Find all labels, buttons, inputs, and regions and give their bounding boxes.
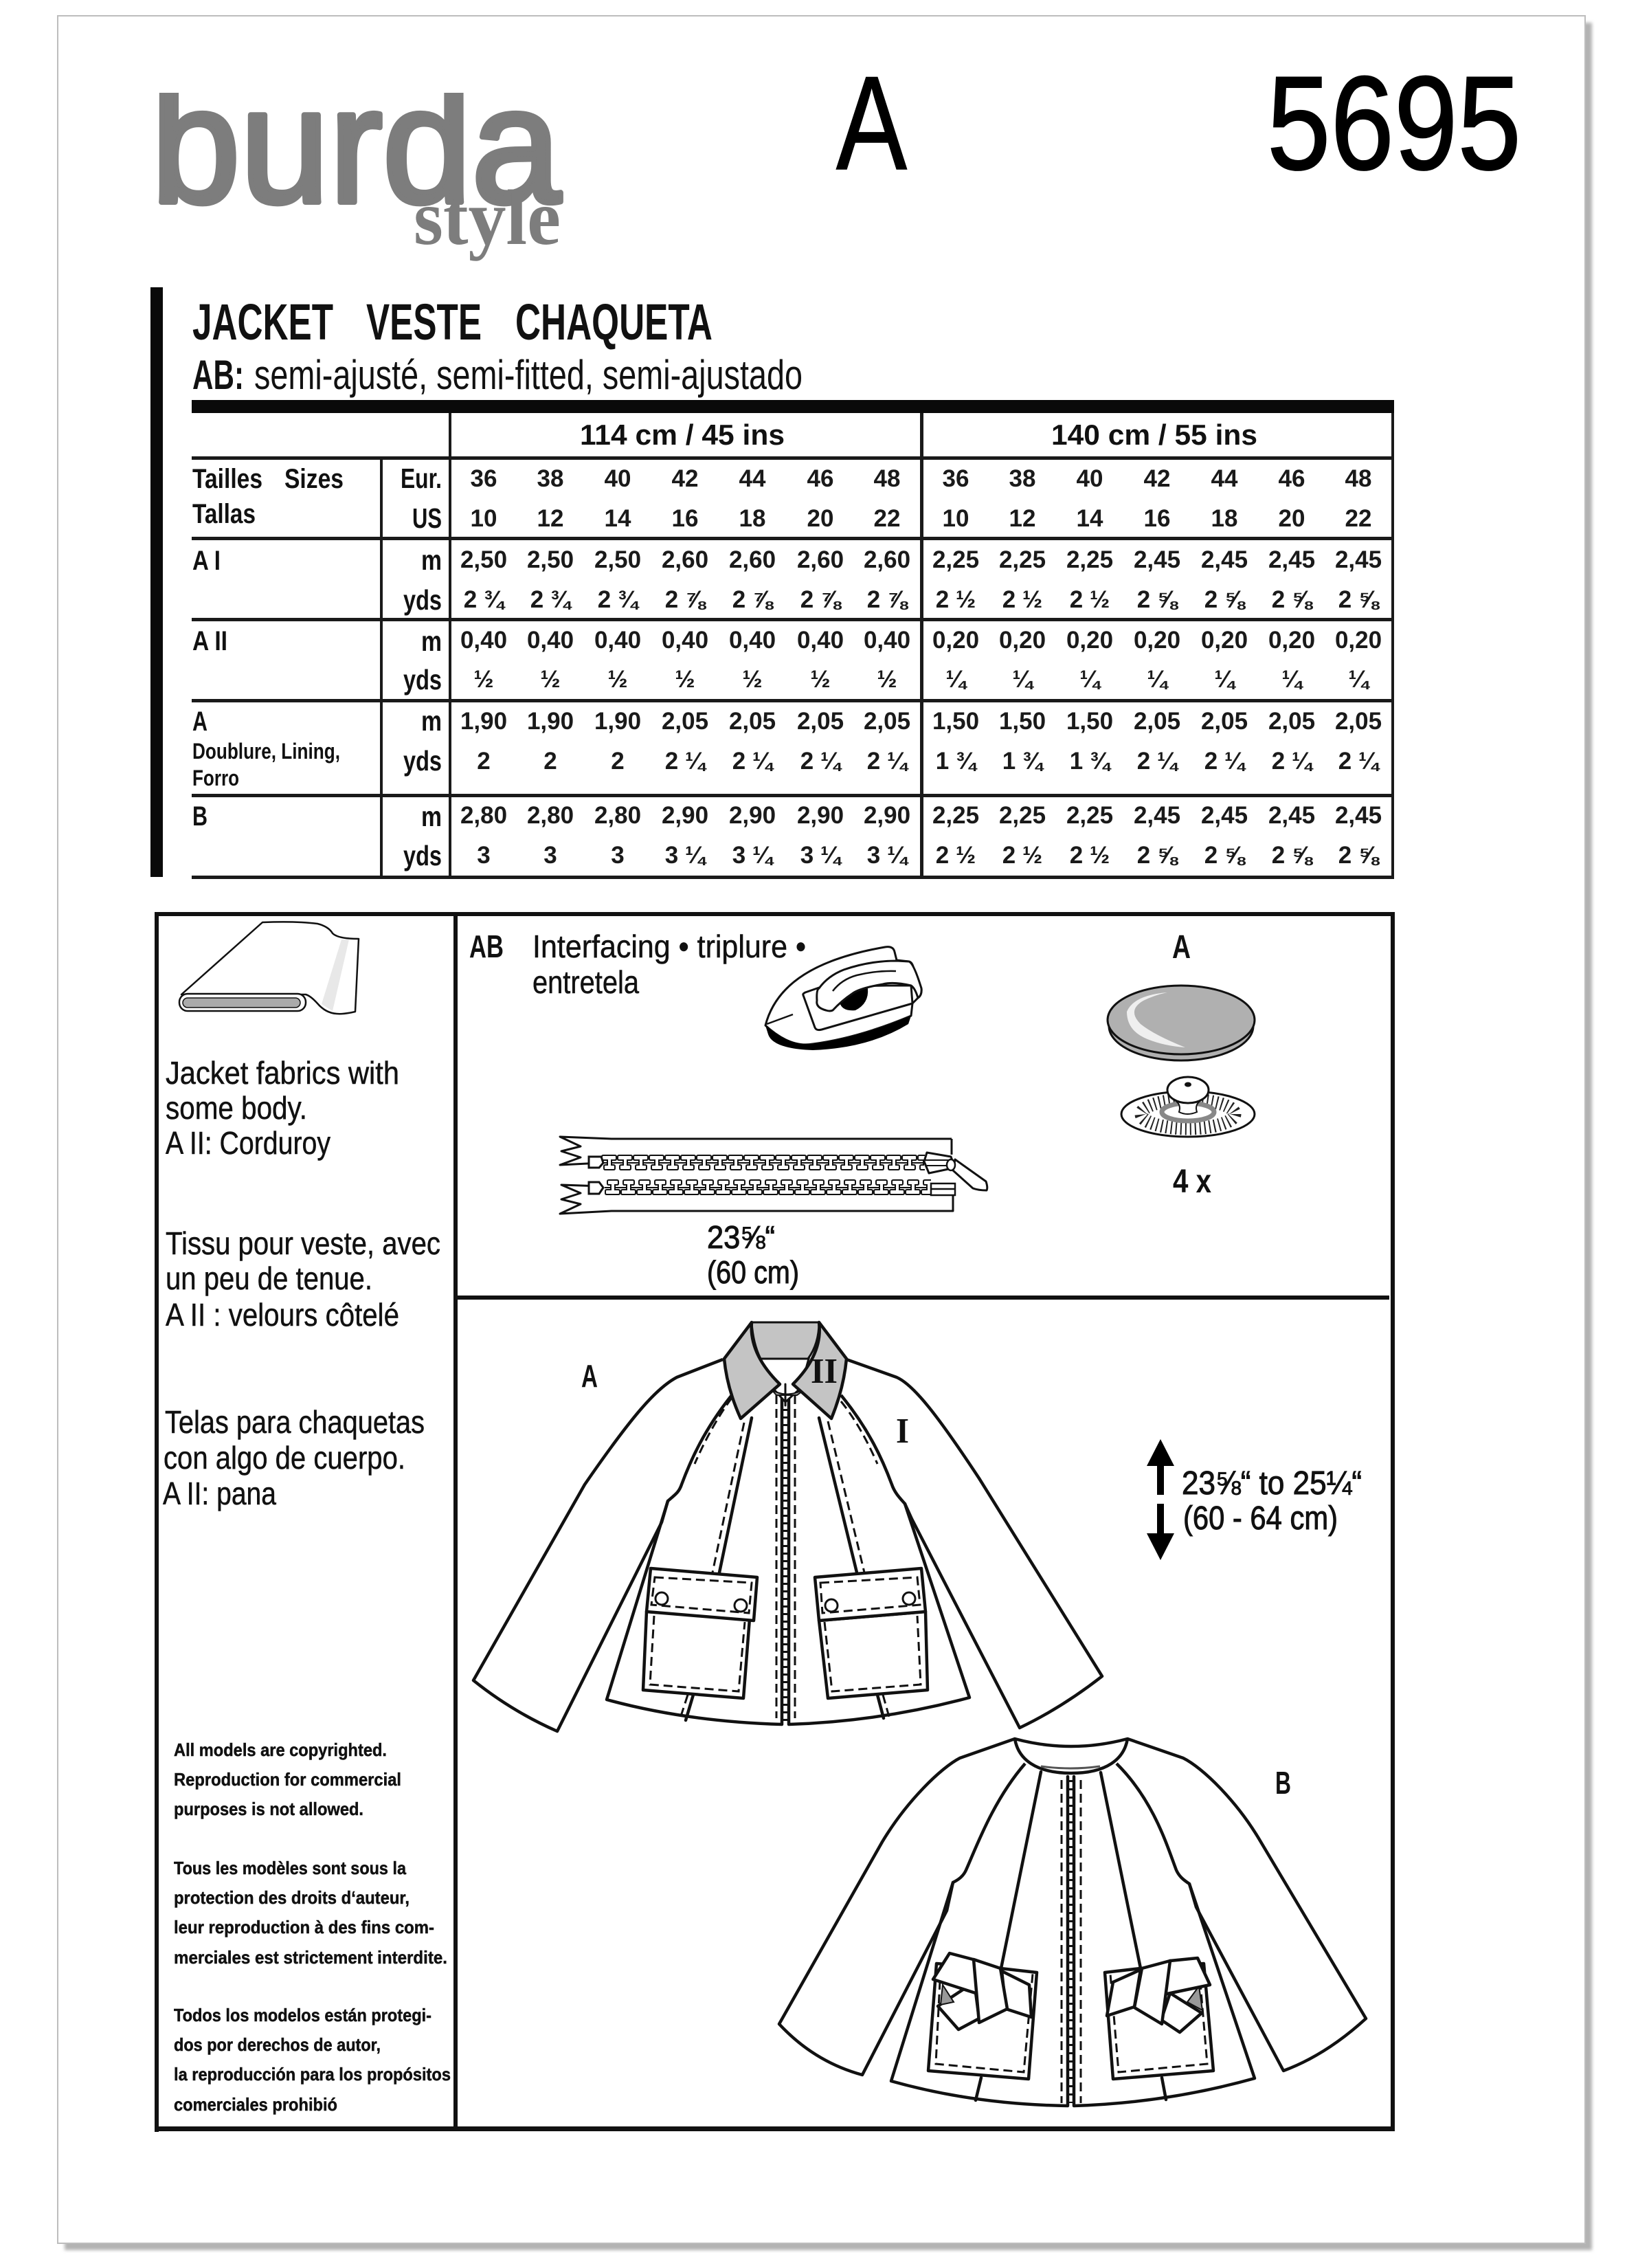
row: A I metres: 2,60 xyxy=(662,546,708,573)
row: A II metres: 0,40 xyxy=(662,627,708,654)
row: B metres: 2,45 xyxy=(1134,802,1180,829)
row: A II yards: ½ xyxy=(877,666,897,693)
unit labels: yds xyxy=(403,584,442,616)
left tie pocket xyxy=(928,1953,1037,2079)
row: A lining metres xyxy=(460,708,1382,735)
panel: technical drawings xyxy=(473,1322,1366,2106)
row: A I yards: 2 ⅝ xyxy=(1204,586,1246,613)
row: B metres: 2,25 xyxy=(932,802,979,829)
row: A II metres: 0,20 xyxy=(1201,627,1248,654)
row: B yards: 2 ⅝ xyxy=(1338,842,1380,869)
row: B yards: 2 ⅝ xyxy=(1137,842,1179,869)
row: A I metres: 2,50 xyxy=(527,546,574,573)
header: 140 cm width: 140 cm / 55 ins xyxy=(1051,419,1257,451)
row: Eur sizes: 38 xyxy=(537,465,563,492)
row: A I metres xyxy=(460,546,1382,573)
row: Eur sizes: 48 xyxy=(1345,465,1371,492)
row: A I metres: 2,25 xyxy=(932,546,979,573)
view letter A: A xyxy=(836,49,907,198)
row: A II metres: 0,20 xyxy=(999,627,1046,654)
row: Eur sizes: 36 xyxy=(943,465,969,492)
text: Spanish fabrics xyxy=(163,1404,425,1511)
body xyxy=(607,1395,969,1724)
text: copyright notices: merciales est strictement interdite. xyxy=(174,1947,447,1968)
label: zipper length: 23⅝“ xyxy=(707,1219,775,1255)
row: Eur sizes: 42 xyxy=(1144,465,1170,492)
title: VESTE xyxy=(366,293,482,351)
text: copyright notices: Tous les modèles sont sous la xyxy=(174,1858,406,1878)
text: copyright notices: dos por derechos de autor, xyxy=(174,2034,381,2055)
text: Spanish fabrics: A II: pana xyxy=(163,1476,276,1511)
row: US sizes: 20 xyxy=(807,505,833,532)
row: B metres: 2,80 xyxy=(594,802,641,829)
label: quantity 4 x: 4 x xyxy=(1173,1164,1211,1200)
row: A I yards: 2 ⅝ xyxy=(1272,586,1314,613)
row: A II yards: ½ xyxy=(540,666,561,693)
icon: zipper xyxy=(560,1137,987,1214)
text: French fabrics: un peu de tenue. xyxy=(166,1260,372,1296)
title: JACKET xyxy=(192,293,333,351)
row: A lining metres: 2,05 xyxy=(662,708,708,735)
label: view A: A xyxy=(581,1358,598,1394)
text: English fabrics: A II: Corduroy xyxy=(166,1125,330,1161)
row: A I yards xyxy=(464,586,1380,613)
text: copyright notices xyxy=(174,1739,451,2115)
row: A lining yards: 2 xyxy=(543,748,557,775)
header: 114 cm width: 114 cm / 45 ins xyxy=(580,419,785,451)
unit labels: yds xyxy=(403,840,442,871)
row: A I metres: 2,60 xyxy=(797,546,844,573)
row: A II yards: ¼ xyxy=(1079,666,1101,693)
text: English fabrics xyxy=(166,1055,399,1161)
left pocket xyxy=(643,1568,757,1698)
text: French fabrics xyxy=(166,1225,440,1333)
label: zipper length: (60 cm) xyxy=(707,1254,799,1290)
row: A I yards: 2 ⅝ xyxy=(1137,586,1179,613)
row: A I metres: 2,50 xyxy=(594,546,641,573)
row: A I metres: 2,60 xyxy=(729,546,776,573)
row: US sizes: 20 xyxy=(1279,505,1305,532)
text: English fabrics: some body. xyxy=(166,1090,307,1126)
row: A lining yards: 2 ¼ xyxy=(1338,748,1380,775)
title: CHAQUETA xyxy=(515,293,713,351)
row labels: A I xyxy=(192,546,221,576)
logo: burda style xyxy=(159,93,563,261)
label: view B: B xyxy=(1275,1765,1291,1801)
row: Eur sizes: 38 xyxy=(1009,465,1035,492)
row: B metres: 2,45 xyxy=(1268,802,1315,829)
row: A lining yards: 2 ¼ xyxy=(800,748,842,775)
row labels xyxy=(192,464,344,832)
row: A lining metres: 2,05 xyxy=(797,708,844,735)
unit labels: yds xyxy=(403,745,442,777)
row: A lining metres: 1,90 xyxy=(460,708,507,735)
row: B yards: 3 ¼ xyxy=(665,842,707,869)
row: A lining metres: 2,05 xyxy=(864,708,910,735)
row: B yards: 2 ⅝ xyxy=(1272,842,1314,869)
row: A lining metres: 2,05 xyxy=(729,708,776,735)
row: A II yards: ¼ xyxy=(1214,666,1236,693)
text: copyright notices: comerciales prohibió xyxy=(174,2094,337,2115)
sleeves xyxy=(473,1359,1102,1731)
row: B yards: 2 ½ xyxy=(1070,842,1110,869)
row: A I metres: 2,50 xyxy=(460,546,507,573)
row: A I metres: 2,45 xyxy=(1201,546,1248,573)
row: A I yards: 2 ¾ xyxy=(464,586,506,613)
row: US sizes: 14 xyxy=(1077,505,1103,532)
row: A II yards: ¼ xyxy=(1147,666,1169,693)
row: A lining metres: 1,50 xyxy=(932,708,979,735)
row: A lining metres: 2,05 xyxy=(1134,708,1180,735)
row labels: Sizes xyxy=(284,464,344,494)
row: US sizes: 16 xyxy=(672,505,698,532)
unit labels: m xyxy=(421,705,442,737)
icon: snap fastener xyxy=(1121,1077,1255,1137)
row: B metres xyxy=(460,802,1382,829)
row labels: A II xyxy=(192,626,227,656)
icon: covered button xyxy=(1108,986,1255,1060)
row: B yards xyxy=(477,842,1380,869)
row: B yards: 3 ¼ xyxy=(800,842,842,869)
panel: fabric notes xyxy=(163,922,451,2115)
row: A II yards: ¼ xyxy=(1012,666,1034,693)
row: A II metres: 0,40 xyxy=(864,627,910,654)
row: A lining yards: 1 ¾ xyxy=(1070,748,1112,775)
unit labels xyxy=(401,463,442,871)
yardage table xyxy=(192,400,1394,879)
unit labels: m xyxy=(421,544,442,576)
row: US sizes: 22 xyxy=(1345,505,1371,532)
row: B metres: 2,45 xyxy=(1201,802,1248,829)
row: A II metres: 0,20 xyxy=(1066,627,1113,654)
row: US sizes: 10 xyxy=(471,505,497,532)
row: B yards: 3 xyxy=(543,842,557,869)
row: B metres: 2,90 xyxy=(864,802,910,829)
row: US sizes: 12 xyxy=(537,505,563,532)
row: A I yards: 2 ⅞ xyxy=(732,586,774,613)
row: A I yards: 2 ½ xyxy=(1070,586,1110,613)
row: A lining metres: 1,90 xyxy=(527,708,574,735)
row: A I yards: 2 ½ xyxy=(936,586,976,613)
text: copyright notices: Reproduction for commercial xyxy=(174,1769,401,1790)
row: A lining metres: 1,90 xyxy=(594,708,641,735)
row: Eur sizes: 44 xyxy=(1211,465,1238,492)
text: copyright notices: Todos los modelos están protegi- xyxy=(174,2005,431,2025)
row: A II metres: 0,40 xyxy=(460,627,507,654)
row: US sizes: 14 xyxy=(605,505,631,532)
icon: fabric bolt xyxy=(179,922,359,1014)
text: French fabrics: Tissu pour veste, avec xyxy=(166,1225,440,1261)
row: A lining metres: 1,50 xyxy=(1066,708,1113,735)
body xyxy=(891,1777,1255,2106)
row: A I yards: 2 ⅝ xyxy=(1338,586,1380,613)
subtitle: fit: semi-ajusté, semi-fitted, semi-ajustado xyxy=(254,352,803,398)
label: collar II: II xyxy=(811,1352,838,1391)
row: A II yards: ½ xyxy=(607,666,628,693)
row: B yards: 3 ¼ xyxy=(732,842,774,869)
left margin bar xyxy=(150,287,163,877)
panel: notions xyxy=(469,929,1255,1290)
row labels: B xyxy=(192,801,207,832)
row: A I metres: 2,45 xyxy=(1335,546,1382,573)
label: sleeve I: I xyxy=(896,1412,909,1451)
label: interfacing: AB xyxy=(469,929,504,964)
row: A I yards: 2 ½ xyxy=(1002,586,1042,613)
row: A I metres: 2,45 xyxy=(1268,546,1315,573)
row: A lining yards: 2 ¼ xyxy=(1137,748,1179,775)
row: B yards: 3 xyxy=(477,842,491,869)
row: B metres: 2,80 xyxy=(527,802,574,829)
unit labels: m xyxy=(421,625,442,657)
right pocket xyxy=(815,1568,928,1698)
text: French fabrics: A II : velours côtelé xyxy=(166,1297,399,1333)
unit labels: US xyxy=(412,502,442,534)
row: US sizes: 22 xyxy=(874,505,900,532)
row: A I metres: 2,45 xyxy=(1134,546,1180,573)
row: A II metres: 0,20 xyxy=(1335,627,1382,654)
row: A lining metres: 2,05 xyxy=(1201,708,1248,735)
unit labels: yds xyxy=(403,664,442,696)
row: A II metres xyxy=(460,627,1382,654)
row: B metres: 2,90 xyxy=(729,802,776,829)
row: A II yards: ½ xyxy=(473,666,494,693)
row: A lining yards: 2 ¼ xyxy=(732,748,774,775)
row labels: Tailles xyxy=(192,464,262,494)
collar xyxy=(724,1322,846,1419)
row: A I metres: 2,25 xyxy=(1066,546,1113,573)
row: B yards: 3 ¼ xyxy=(867,842,909,869)
row: A II metres: 0,20 xyxy=(932,627,979,654)
row: A II yards: ¼ xyxy=(1348,666,1370,693)
row labels: Forro xyxy=(192,766,239,790)
row: B metres: 2,90 xyxy=(662,802,708,829)
row: A II yards xyxy=(473,666,1370,693)
row: US sizes: 18 xyxy=(739,505,765,532)
label: finished length: (60 - 64 cm) xyxy=(1183,1500,1338,1537)
row: A lining yards: 2 ¼ xyxy=(867,748,909,775)
text: Spanish fabrics: con algo de cuerpo. xyxy=(164,1440,405,1476)
unit labels: m xyxy=(421,801,442,832)
arrow: up xyxy=(1147,1439,1174,1495)
row: US sizes: 10 xyxy=(943,505,969,532)
row labels: Doublure, Lining, xyxy=(192,739,340,764)
drawing: jacket A xyxy=(473,1322,1102,1731)
neck and seams xyxy=(976,1739,1166,2103)
text: copyright notices: All models are copyrighted. xyxy=(174,1739,387,1760)
row: A II metres: 0,40 xyxy=(729,627,776,654)
sleeves xyxy=(779,1739,1366,2075)
logo: burda style: style xyxy=(414,174,561,261)
row: B yards: 2 ½ xyxy=(1002,842,1042,869)
row: Eur sizes: 46 xyxy=(807,465,833,492)
row: A II metres: 0,20 xyxy=(1134,627,1180,654)
row: B yards: 2 ½ xyxy=(936,842,976,869)
text: copyright notices: la reproducción para los propósitos xyxy=(174,2064,451,2084)
row: A II metres: 0,40 xyxy=(797,627,844,654)
row: US sizes: 18 xyxy=(1211,505,1237,532)
row: A lining metres: 2,05 xyxy=(1268,708,1315,735)
text: copyright notices: purposes is not allowed. xyxy=(174,1799,363,1819)
row: A lining yards: 2 ¼ xyxy=(1204,748,1246,775)
row labels: A xyxy=(192,707,207,737)
row: A II yards: ¼ xyxy=(1281,666,1303,693)
row: B yards: 2 ⅝ xyxy=(1204,842,1246,869)
row: A II metres: 0,40 xyxy=(594,627,641,654)
row: Eur sizes: 40 xyxy=(605,465,631,492)
label: interfacing: Interfacing • triplure • xyxy=(532,929,806,964)
label: zipper length xyxy=(707,1219,799,1290)
row: Eur sizes xyxy=(471,465,1371,492)
row: A I yards: 2 ⅞ xyxy=(800,586,842,613)
row: A II yards: ½ xyxy=(675,666,695,693)
row: A I yards: 2 ⅞ xyxy=(665,586,707,613)
row: B metres: 2,80 xyxy=(460,802,507,829)
lower panel frame xyxy=(155,912,1395,2132)
label: interfacing: entretela xyxy=(532,964,639,1000)
row: B metres: 2,90 xyxy=(797,802,844,829)
row: A I yards: 2 ⅞ xyxy=(867,586,909,613)
pattern number: 5695 xyxy=(1267,49,1521,198)
title xyxy=(192,293,713,351)
row: A lining yards: 1 ¾ xyxy=(936,748,978,775)
row: A lining yards: 2 xyxy=(611,748,625,775)
row: Eur sizes: 40 xyxy=(1077,465,1103,492)
row: Eur sizes: 48 xyxy=(874,465,900,492)
label: interfacing xyxy=(469,929,806,1000)
right tie pocket xyxy=(1105,1958,1213,2079)
icon: iron xyxy=(765,947,921,1050)
text: copyright notices: protection des droits d‘auteur, xyxy=(174,1887,410,1908)
row: A lining yards xyxy=(477,748,1380,775)
seams and top-stitching xyxy=(680,1395,889,1722)
row: A II yards: ¼ xyxy=(945,666,967,693)
row: B metres: 2,45 xyxy=(1335,802,1382,829)
subtitle: fit: AB: xyxy=(192,352,244,398)
label: finished length xyxy=(1182,1465,1362,1537)
row: B metres: 2,25 xyxy=(1066,802,1113,829)
row: Eur sizes: 36 xyxy=(471,465,497,492)
row: Eur sizes: 46 xyxy=(1279,465,1305,492)
row: A lining yards: 1 ¾ xyxy=(1002,748,1044,775)
label: finished length: 23⅝“ to 25¼“ xyxy=(1182,1465,1362,1502)
row: A lining yards: 2 xyxy=(477,748,491,775)
row: A I yards: 2 ¾ xyxy=(598,586,640,613)
row: A II metres: 0,20 xyxy=(1268,627,1315,654)
text: English fabrics: Jacket fabrics with xyxy=(166,1055,399,1091)
row: A II yards: ½ xyxy=(742,666,763,693)
row: A lining metres: 2,05 xyxy=(1335,708,1382,735)
row labels: Tallas xyxy=(192,499,256,529)
arrow: down xyxy=(1147,1504,1174,1560)
row: A lining metres: 1,50 xyxy=(999,708,1046,735)
row: A I yards: 2 ¾ xyxy=(530,586,572,613)
drawing: jacket B xyxy=(779,1739,1366,2106)
row: A lining yards: 2 ¼ xyxy=(1272,748,1314,775)
row: Eur sizes: 44 xyxy=(739,465,766,492)
row: A lining yards: 2 ¼ xyxy=(665,748,707,775)
row: B metres: 2,25 xyxy=(999,802,1046,829)
row: A I metres: 2,60 xyxy=(864,546,910,573)
row: A II yards: ½ xyxy=(810,666,831,693)
row: A I metres: 2,25 xyxy=(999,546,1046,573)
row: Eur sizes: 42 xyxy=(672,465,698,492)
row: US sizes xyxy=(471,505,1371,532)
logo: burda style: burda xyxy=(151,53,561,237)
text: copyright notices: leur reproduction à des fins com- xyxy=(174,1917,434,1937)
row: B yards: 3 xyxy=(611,842,625,869)
row: US sizes: 16 xyxy=(1144,505,1170,532)
label: A fastener: A xyxy=(1172,929,1191,966)
row: US sizes: 12 xyxy=(1009,505,1035,532)
unit labels: Eur. xyxy=(401,463,442,494)
row: A II metres: 0,40 xyxy=(527,627,574,654)
text: Spanish fabrics: Telas para chaquetas xyxy=(165,1404,425,1440)
